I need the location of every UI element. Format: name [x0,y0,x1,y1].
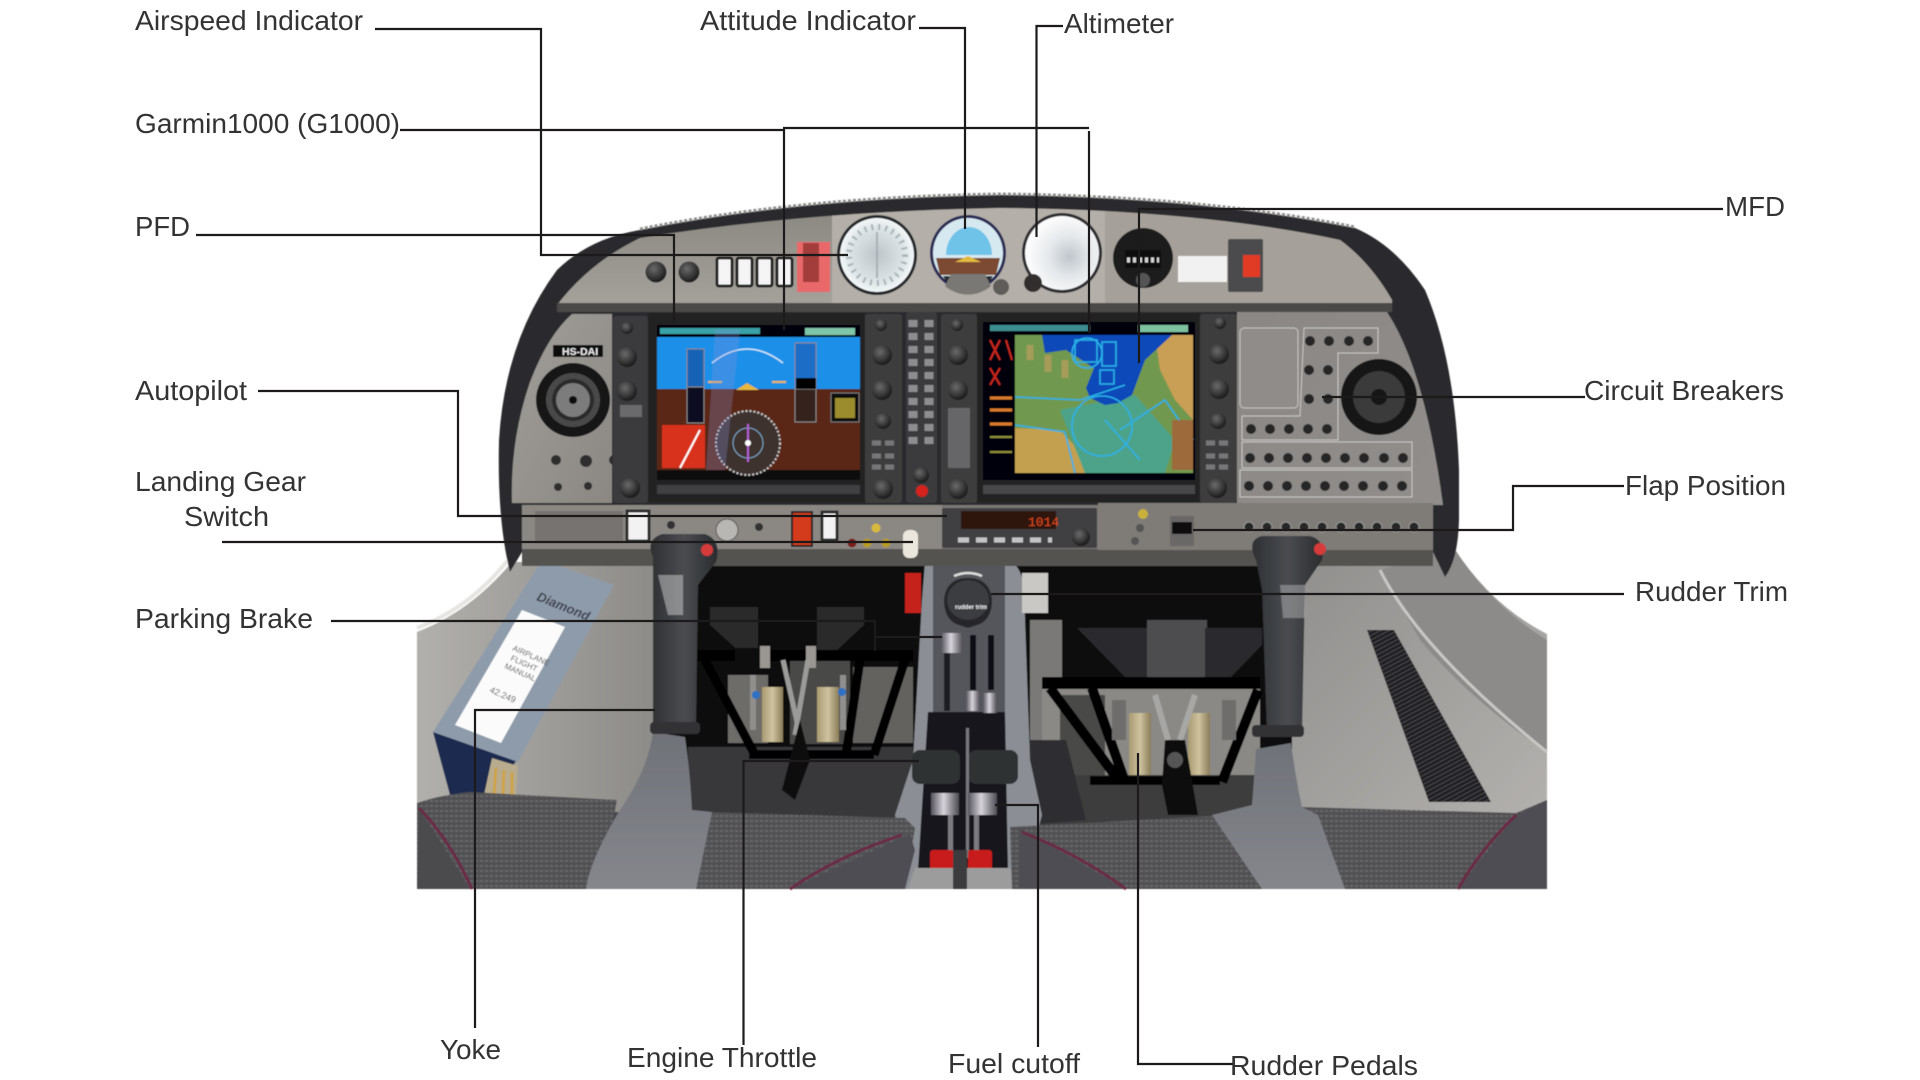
label: Circuit Breakers: Circuit Breakers [1584,375,1784,406]
MFD map land [1015,335,1193,473]
avionics band [612,312,1237,504]
label: Landing Gear Switch: Switch [184,501,269,532]
ignition switches [551,455,619,491]
left yoke [650,534,718,734]
label: PFD: PFD [135,211,190,242]
PFD softkeys [657,485,860,494]
leader: Rudder Trim [991,593,1624,595]
lower switch strip [522,503,1433,558]
primary flight display [648,313,865,502]
label: Attitude Indicator: Attitude Indicator [700,5,916,36]
MFD softkeys [983,485,1195,494]
leader: Attitude Indicator [919,28,965,229]
leader: Airspeed Indicator [375,29,848,255]
label: Rudder Trim: Rudder Trim [1635,576,1788,607]
label: Landing Gear Switch: Landing Gear [135,466,306,497]
rudder pedals: left [692,607,913,800]
MFD terrain scale [1172,420,1193,470]
attitude indicator dial [930,215,1009,295]
leader: Autopilot [258,391,947,516]
leader: Garmin1000 [400,128,1089,333]
multi-function display [977,313,1200,502]
PFD attitude symbol [708,381,786,390]
PFD altitude tape [795,343,816,422]
leader: Fuel cutoff [995,805,1038,1047]
leader: Yoke [475,710,655,1028]
left yoke boot [586,732,712,889]
label: Parking Brake: Parking Brake [135,603,313,634]
footwell: right [1010,556,1292,825]
red placard [905,573,921,613]
leader: Flap Position [1193,486,1624,530]
label: Garmin1000 (G1000): Garmin1000 (G1000) [135,108,400,139]
label: Fuel cutoff: Fuel cutoff [948,1048,1080,1079]
registration plate: HS-DAI [562,346,598,358]
MFD map airways [1015,338,1193,473]
placard text block [535,511,623,543]
power levers [912,728,1018,860]
knob column left of MFD [941,314,977,503]
breaker outlines [1240,328,1412,497]
leader: Landing Gear Switch [222,541,913,543]
label: Altimeter: Altimeter [1064,8,1174,39]
flight manual [433,560,614,795]
leader: Altimeter [1036,26,1063,237]
right side panel [1237,312,1443,505]
center console [895,558,1042,889]
PFD roll arc [712,349,783,363]
white tag [1022,573,1048,613]
leader: Circuit Breakers [1322,396,1585,398]
leader: Rudder Pedals [1138,753,1235,1064]
left side panel [512,314,619,503]
PFD HSI [716,411,780,475]
label: Autopilot: Autopilot [135,375,247,406]
footwell: left [660,555,935,825]
leader: MFD [1139,209,1723,363]
MFD map water [1042,335,1172,405]
right yoke mount [1341,359,1417,435]
right yoke [1252,536,1326,737]
radio stack [942,508,1097,548]
photo: cockpit interior [417,194,1547,889]
leader: PFD [196,235,674,322]
left yoke mount [536,363,610,437]
flight manual: 42.249 [488,685,517,705]
right sidewall [1290,545,1547,815]
MFD engine strip [990,340,1012,452]
right yoke boot [1212,743,1345,889]
gear indicators [848,524,890,548]
audio panel [906,312,937,503]
PFD sky [657,337,860,389]
rudder pedals: right [1042,628,1262,815]
PFD inset map [662,425,705,468]
light switches [717,258,792,286]
PFD annunciation box [831,393,859,422]
flight manual: MANUAL [503,662,538,684]
label: Flap Position: Flap Position [1625,470,1786,501]
radio stack: 1014 [1028,515,1059,530]
flaps selector [1131,509,1194,546]
instrument panel shroud [499,195,1459,577]
master switches [627,511,837,546]
knob column left of PFD [613,316,648,503]
left seat [417,792,915,889]
landing gear knob [903,530,918,558]
label: Airspeed Indicator: Airspeed Indicator [135,5,363,36]
dimmer knobs [646,262,700,282]
lower breakers [1244,522,1419,532]
flight manual: Diamond [535,589,593,624]
right seat [1010,800,1547,889]
flight manual: AIRPLANE [511,644,551,668]
knob column right of MFD [1200,314,1237,503]
label: MFD: MFD [1725,191,1785,222]
leader: Parking Brake [331,621,942,651]
upper instrument panel [557,205,1395,312]
circuit breakers [1244,336,1408,492]
magnetic compass [1113,228,1173,288]
emergency switch [797,242,830,292]
knob column right of PFD [865,314,902,503]
right sidewall vent grille [1367,630,1491,802]
white placard [1178,256,1227,282]
PFD ground [657,389,860,470]
label: Engine Throttle: Engine Throttle [627,1042,817,1073]
mixture and trim levers [941,633,997,713]
flight manual: FLIGHT [509,654,539,673]
leader: Engine Throttle [744,761,919,1045]
red fuel cutoff guards [930,850,992,870]
red alternate switch [1228,239,1263,292]
PFD airspeed tape [687,349,704,423]
rudder trim wheel: rudder trim [955,605,987,611]
altimeter dial [1022,213,1102,293]
left sidewall [417,560,660,812]
registration plate [553,345,603,358]
floor behind seats [417,790,1547,889]
windscreen reflection [706,330,740,470]
rudder trim wheel [944,573,992,628]
airspeed indicator dial [837,215,917,295]
label: Yoke: Yoke [440,1034,501,1065]
